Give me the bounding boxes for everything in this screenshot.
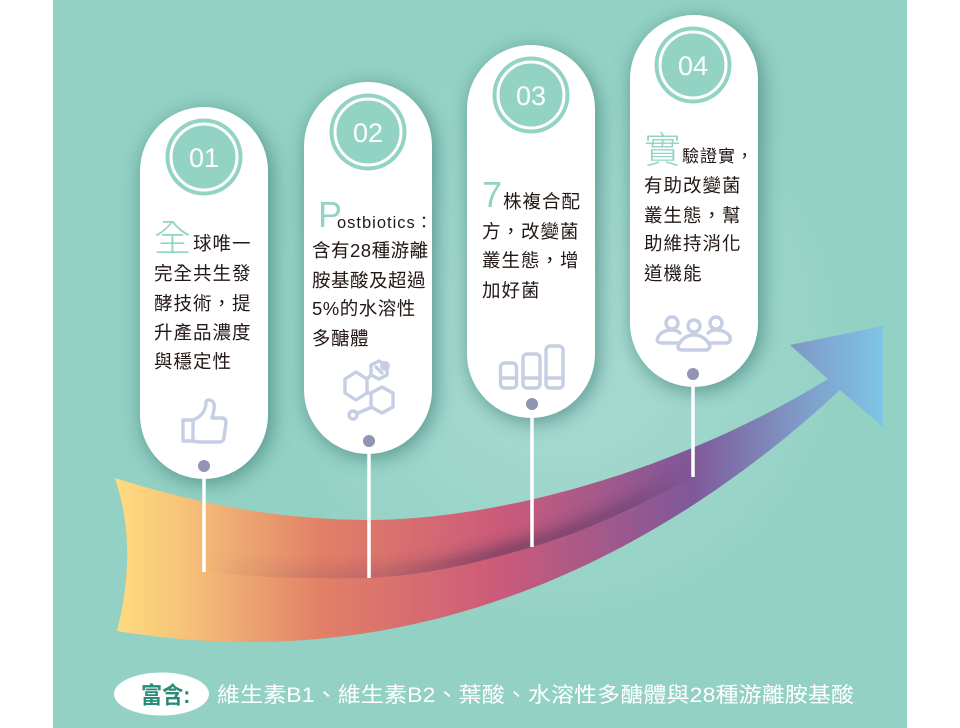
icon: thumbs up bbox=[183, 400, 226, 442]
pill shadows bbox=[142, 19, 762, 483]
badge 02 bbox=[330, 94, 406, 170]
text: step 04: 有助改變菌 bbox=[644, 175, 742, 196]
text: step 04: 驗證實， bbox=[682, 147, 754, 166]
text: step 03: 叢生態，增 bbox=[482, 250, 580, 271]
icon: molecule bbox=[345, 361, 393, 419]
badge 03: 03 bbox=[516, 81, 546, 111]
text: step 02: P bbox=[318, 194, 342, 235]
text: step 04: 實 bbox=[644, 120, 681, 174]
badge 02: 02 bbox=[353, 118, 383, 148]
badge 04 bbox=[654, 26, 732, 104]
badge 04: 04 bbox=[678, 51, 708, 81]
panel: step 02 bbox=[304, 82, 433, 454]
dot 02 bbox=[363, 435, 375, 447]
text: step 02: 胺基酸及超過 bbox=[312, 270, 426, 291]
badge 01: 01 bbox=[189, 143, 219, 173]
text: step 02 bbox=[312, 194, 433, 349]
text: step 02: 多醣體 bbox=[312, 328, 369, 349]
footer: nutrient list bbox=[114, 672, 854, 716]
rising arrow bbox=[115, 326, 883, 642]
nutrient text: 維生素B1、維生素B2、葉酸、水溶性多醣體與28種游離胺基酸 bbox=[217, 683, 854, 707]
text: step 03: 加好菌 bbox=[482, 280, 541, 301]
text: step 03: 方，改變菌 bbox=[482, 221, 580, 242]
text: step 01: 全 bbox=[154, 208, 191, 262]
badge 03 bbox=[492, 56, 570, 134]
connector lines bbox=[204, 380, 693, 578]
text: step 04: 道機能 bbox=[644, 263, 703, 284]
dot 01 bbox=[198, 460, 210, 472]
text: step 04: 助維持消化 bbox=[644, 233, 742, 254]
panel: step 03 bbox=[467, 45, 595, 418]
text: step 01: 完全共生發 bbox=[154, 263, 252, 284]
text: step 02: 含有28種游離 bbox=[312, 240, 429, 261]
text: step 01: 與穩定性 bbox=[154, 351, 232, 372]
panel: step 04 bbox=[630, 15, 758, 387]
text: step 03: 株複合配 bbox=[503, 191, 581, 212]
text: step 01: 酵技術，提 bbox=[154, 293, 252, 314]
badge 01 bbox=[166, 118, 242, 196]
text: step 03: 7 bbox=[482, 174, 502, 215]
dot 03 bbox=[526, 398, 538, 410]
text: step 04 bbox=[644, 120, 754, 284]
text: step 01 bbox=[154, 208, 252, 372]
dot 04 bbox=[687, 368, 699, 380]
label badge: 富含: bbox=[141, 682, 190, 708]
icon: people group bbox=[657, 317, 730, 350]
panel: step 01 bbox=[140, 107, 268, 479]
text: step 01: 升產品濃度 bbox=[154, 322, 252, 343]
text: step 04: 叢生態，幫 bbox=[644, 205, 742, 226]
text: step 03 bbox=[482, 174, 581, 301]
label badge bbox=[114, 672, 209, 716]
text: step 02: ostbiotics： bbox=[337, 214, 433, 232]
text: step 02: 5%的水溶性 bbox=[312, 298, 416, 319]
icon: bar chart bbox=[500, 346, 563, 388]
text: step 01: 球唯一 bbox=[193, 233, 252, 254]
